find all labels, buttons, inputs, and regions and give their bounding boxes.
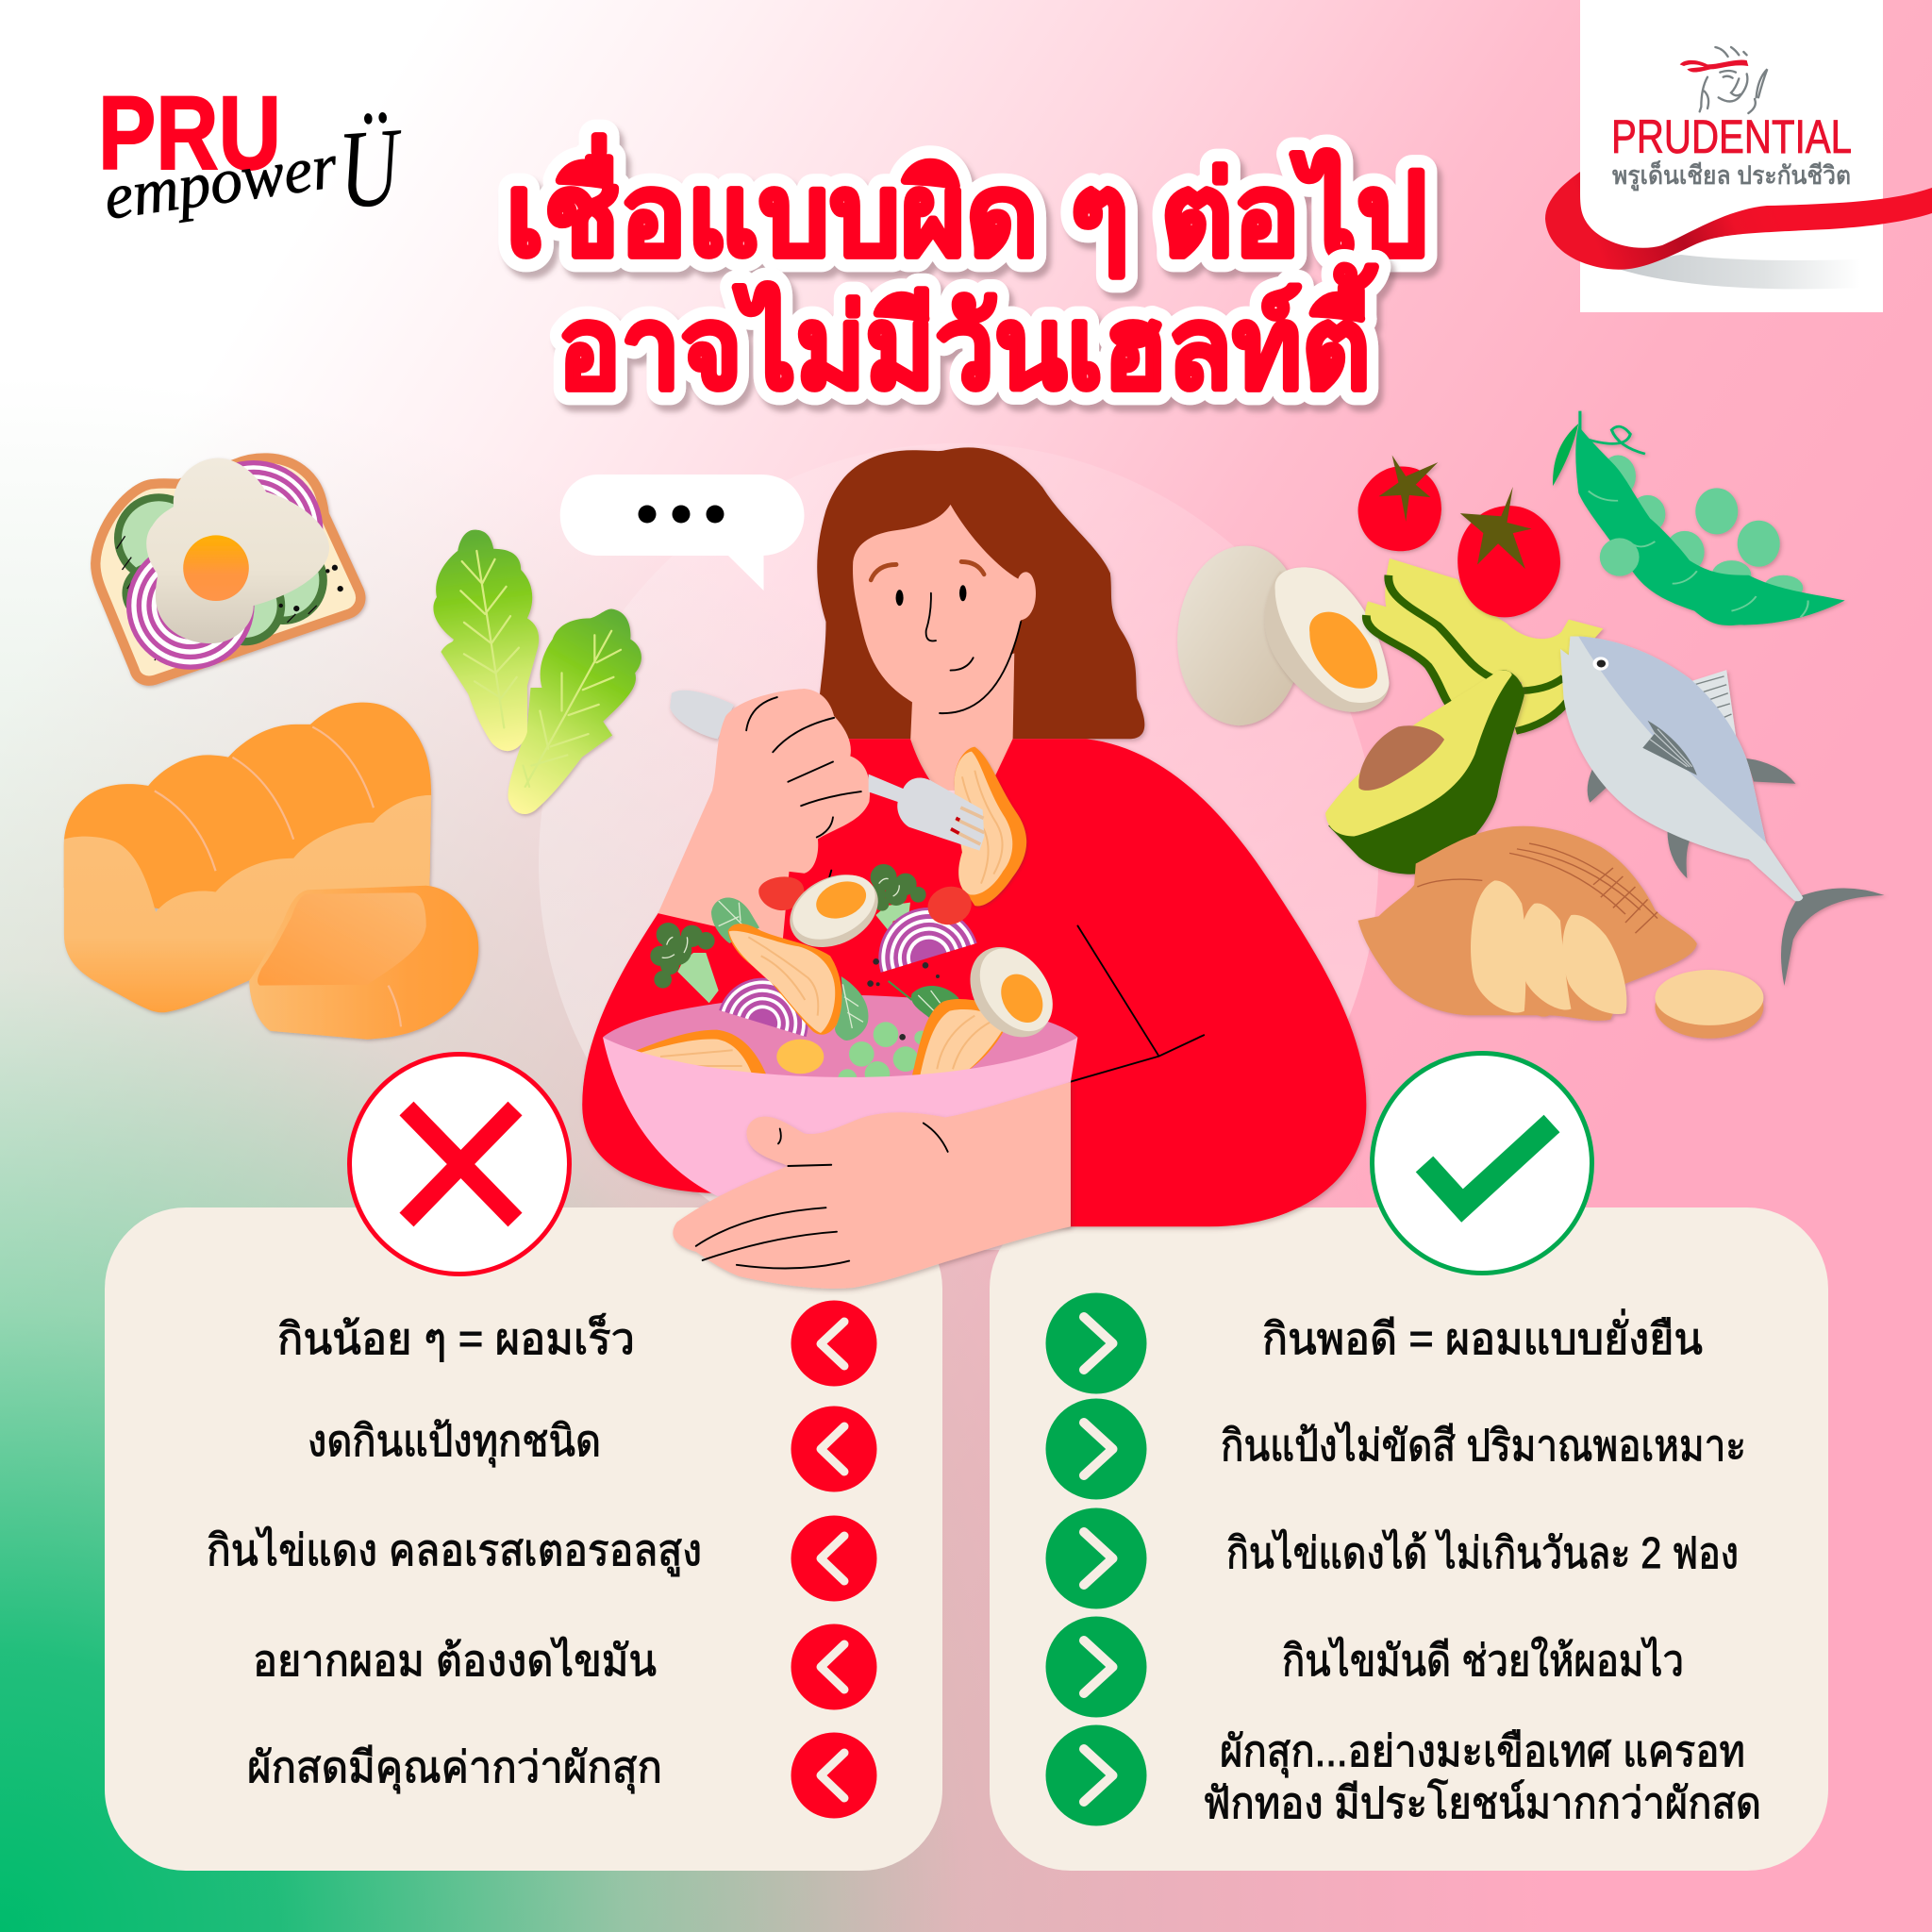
icon: avocado toast with egg <box>95 458 360 681</box>
icon: pea pod <box>1553 411 1845 625</box>
fact rows <box>1045 1292 1761 1827</box>
tomato piece left <box>758 876 804 910</box>
eyes <box>896 585 966 606</box>
beet lower <box>719 967 820 1037</box>
myth row 5: ผักสดมีคุณค่ากว่าผักสุก <box>247 1742 662 1794</box>
icon: whole boiled egg <box>1177 545 1304 725</box>
illustration: woman eating salad <box>582 447 1366 1289</box>
icon: X circle <box>349 1055 570 1274</box>
myth row 1: กินน้อย ๆ = ผอมเร็ว <box>277 1313 635 1363</box>
fact row 3 <box>1045 1507 1739 1609</box>
icon: fish <box>1560 636 1885 986</box>
myth row 1 <box>277 1300 877 1387</box>
logo script empower: empower <box>100 129 341 233</box>
myth row 3 <box>207 1515 877 1602</box>
icon: check circle <box>1372 1053 1592 1274</box>
fact row 3: กินไข่แดงได้ ไม่เกินวันละ 2 ฟอง <box>1226 1528 1739 1577</box>
ellipsis dots <box>638 506 724 523</box>
fork handle end <box>670 691 734 739</box>
spinach left <box>711 898 759 943</box>
finger lines <box>746 697 861 838</box>
logo white plate <box>1580 0 1883 312</box>
panel: facts (right) <box>990 1208 1828 1871</box>
eyebrows <box>871 561 984 580</box>
sweater fold lines <box>828 871 1204 1082</box>
loaf crust top <box>64 703 431 922</box>
pepper dots <box>867 958 940 1041</box>
logo: PRU empower U <box>98 75 408 233</box>
logo script U: Ü <box>335 104 408 232</box>
title line 2: อาจไม่มีวันเฮลท์ตี้ <box>558 264 1378 412</box>
food group right <box>1177 411 1885 1039</box>
myth row 2: งดกินแป้งทุกชนิด <box>308 1416 601 1468</box>
logo swoosh grey <box>1618 255 1860 289</box>
bubble shape <box>560 475 804 591</box>
salad flying from bowl <box>629 747 1069 1088</box>
sweater body <box>582 739 1366 1226</box>
myth row 2 <box>308 1406 877 1492</box>
peas <box>838 1022 928 1088</box>
title line 2: อาจไม่มีวันเฮลท์ตี้ <box>558 264 1378 412</box>
fact row 5: ฟักทอง มีประโยชน์มากกว่าผักสด <box>1203 1778 1761 1827</box>
egg lower <box>954 931 1069 1053</box>
loaf crumb side <box>64 795 431 1012</box>
icon: avocado half <box>1325 670 1524 874</box>
myth rows <box>207 1300 877 1819</box>
myth row 4 <box>253 1624 877 1709</box>
broccoli upper <box>867 864 926 932</box>
hand holding fork <box>658 689 870 941</box>
myth row 5 <box>247 1732 877 1819</box>
bowl body <box>603 1038 1077 1196</box>
icon: sweet potato <box>1358 826 1697 1026</box>
yellow potato <box>776 1040 824 1074</box>
fact row 5: ผักสุก...อย่างมะเขือเทศ แครอท <box>1220 1726 1745 1778</box>
title line 1: เชื่อแบบผิด ๆ ต่อไป <box>506 134 1427 279</box>
hair <box>817 447 1144 739</box>
bread slice <box>249 886 478 1040</box>
face <box>853 505 1036 711</box>
hand lines <box>696 1124 948 1269</box>
icon: bread loaf <box>64 703 478 1040</box>
logo: Prudential <box>1545 0 1932 312</box>
icon: sweet potato round slice <box>1655 970 1763 1039</box>
neck <box>910 653 1014 791</box>
icon: tomato back <box>1358 455 1441 551</box>
slice on fork <box>955 747 1026 906</box>
bowl back rim <box>603 995 1077 1082</box>
title line 1: เชื่อแบบผิด ๆ ต่อไป <box>506 134 1427 279</box>
fact row 5 <box>1045 1724 1761 1827</box>
title <box>506 134 1427 412</box>
icon: halved boiled egg <box>1265 567 1389 712</box>
fork head <box>869 774 984 851</box>
fact row 4: กินไขมันดี ช่วยให้ผอมไว <box>1282 1636 1684 1685</box>
fact row 1 <box>1045 1292 1703 1394</box>
fact row 2: กินแป้งไม่ขัดสี ปริมาณพอเหมาะ <box>1221 1421 1746 1470</box>
fact row 4 <box>1045 1617 1684 1717</box>
pale circle behind the person <box>539 498 1378 1250</box>
right lettuce leaf <box>508 609 641 814</box>
logo text Thai: พรูเด็นเชียล ประกันชีวิต <box>1612 158 1851 191</box>
myth row 4: อยากผอม ต้องงดไขมัน <box>253 1636 657 1685</box>
left lettuce leaf <box>433 530 539 751</box>
icon: avocado slices <box>1365 558 1603 733</box>
egg upper <box>777 860 891 961</box>
icon: tomato front <box>1457 487 1560 617</box>
broccoli left <box>650 923 719 1003</box>
slice in bowl left <box>629 1030 767 1077</box>
icon: lettuce leaves <box>433 530 641 814</box>
slice middle <box>728 924 841 1035</box>
beet upper <box>866 895 977 973</box>
speech bubble <box>560 475 804 591</box>
fact row 2 <box>1045 1398 1746 1500</box>
nose and mouth <box>926 593 1021 713</box>
spinach small <box>889 981 959 1019</box>
logo text PRUDENTIAL: PRUDENTIAL <box>1611 110 1852 163</box>
spinach lower <box>835 976 868 1041</box>
panel: myths (left) <box>105 1208 942 1871</box>
logo ribbon red <box>1545 172 1932 270</box>
logo mercury head <box>1680 47 1767 113</box>
myth row 3: กินไข่แดง คลอเรสเตอรอลสูง <box>207 1525 702 1576</box>
slice in bowl right <box>912 999 1007 1077</box>
tomato piece right <box>924 882 975 929</box>
fact row 1: กินพอดี = ผอมแบบยั่งยืน <box>1262 1308 1703 1363</box>
arm and hand holding bowl <box>673 1082 1071 1289</box>
logo wordmark PRU: PRU <box>98 75 281 192</box>
